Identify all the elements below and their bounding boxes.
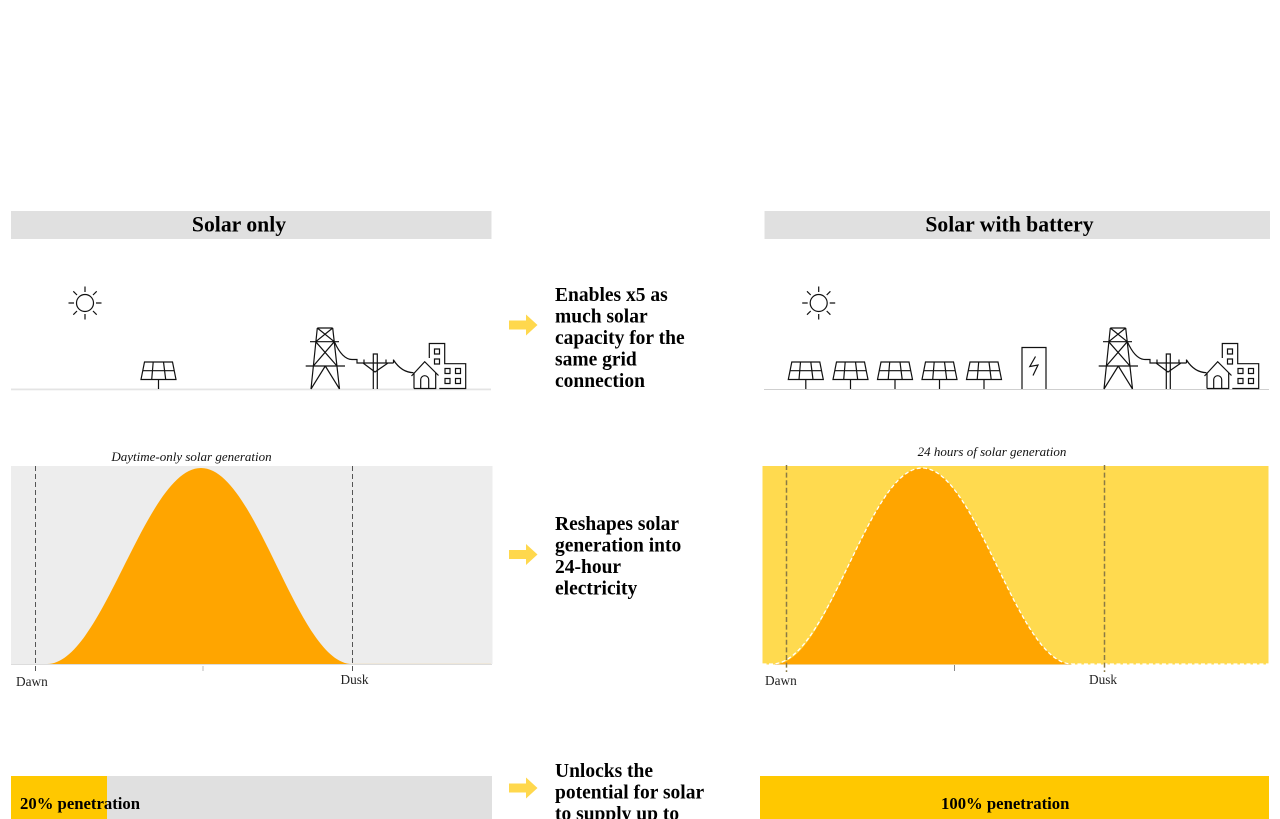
heading: solar only: Solar only (192, 212, 286, 236)
chart: 24 hours of solar generation: Dawn (765, 673, 797, 688)
text: reshapes generation: 24-hour (555, 557, 621, 578)
text: enables x5 capacity: Enables x5 as (555, 285, 668, 306)
heading: solar with battery (764, 211, 1270, 239)
chart: daytime-only solar generation: Daytime-only solar generation (110, 449, 272, 464)
chart: daytime-only solar generation (11, 449, 492, 689)
arrow: capacity (509, 314, 538, 336)
text: enables x5 capacity: much solar (555, 306, 648, 328)
text: unlocks potential: Unlocks the (555, 761, 653, 782)
bar: 100% penetration (760, 776, 1269, 819)
text: enables x5 capacity: capacity for the (555, 328, 685, 349)
text: enables x5 capacity: same grid (555, 350, 637, 370)
panel: solar with battery (760, 211, 1270, 819)
text: reshapes generation: electricity (555, 578, 638, 600)
panel: benefits column (509, 285, 709, 819)
bar: 20% penetration (11, 776, 492, 819)
text: enables x5 capacity: connection (555, 371, 645, 392)
heading: solar with battery: Solar with battery (925, 212, 1094, 236)
chart: 24 hours of solar generation: Dusk (1089, 672, 1117, 687)
heading: solar only (11, 211, 492, 239)
chart: 24 hours of solar generation: 24 hours of solar generation (918, 444, 1066, 459)
scene: single panel connected to the grid (11, 286, 491, 390)
arrow: penetration (509, 778, 538, 798)
chart: daytime-only solar generation: Dawn (16, 674, 48, 689)
text: reshapes generation: generation into (555, 536, 681, 556)
text: unlocks potential: potential for solar (555, 782, 704, 804)
bar: 100% penetration: 100% penetration (941, 794, 1070, 813)
chart: daytime-only solar generation: Dusk (340, 672, 369, 687)
panel: solar only (11, 211, 492, 819)
arrow: generation (509, 544, 538, 565)
text: reshapes generation: Reshapes solar (555, 514, 679, 535)
chart: 24 hours of solar generation (762, 444, 1268, 688)
scene: five panels with battery connected to the grid (764, 286, 1269, 390)
bar: 20% penetration: 20% penetration (20, 794, 141, 813)
